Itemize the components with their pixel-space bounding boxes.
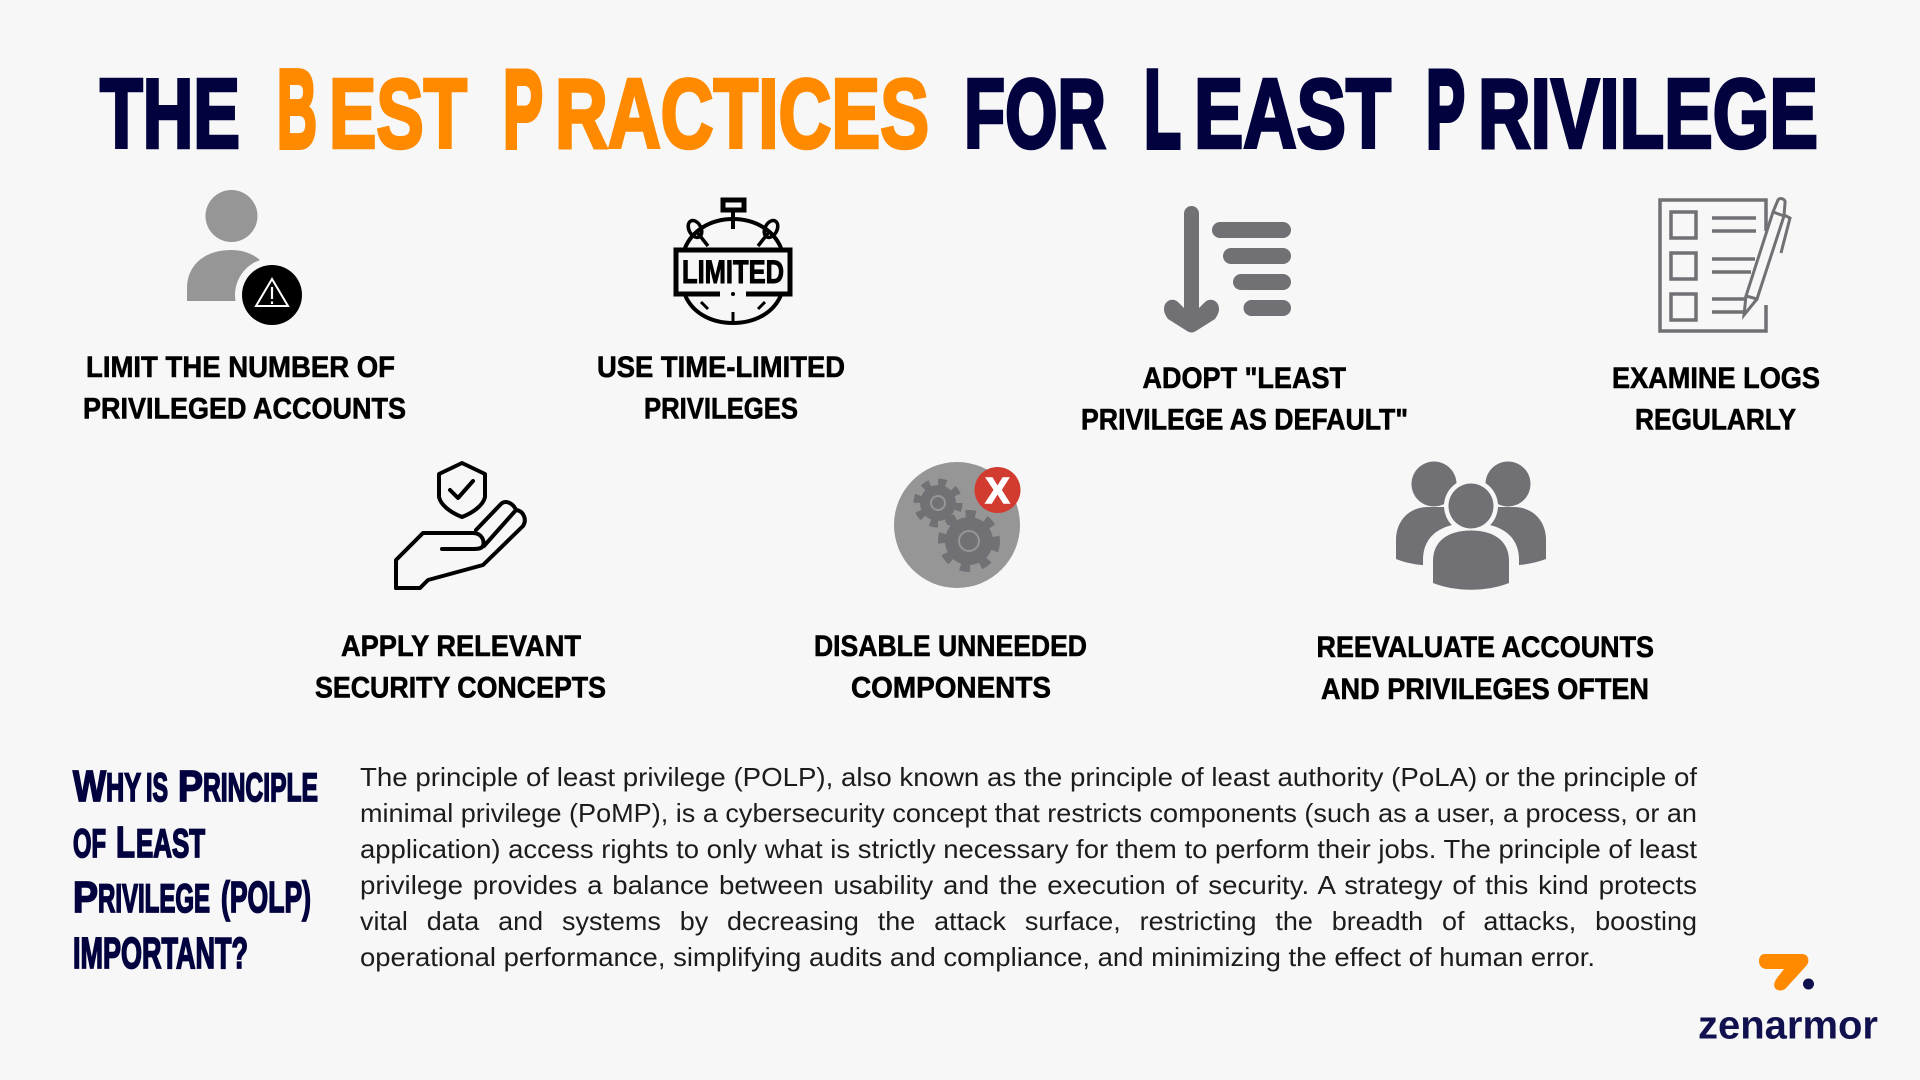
label: examine logs: REGULARLY xyxy=(1635,404,1796,436)
heading: why is polp important: OF xyxy=(73,822,106,866)
red badge letter X: X xyxy=(985,470,1010,511)
logo: zenarmor xyxy=(1698,954,1878,1048)
icon: checklist with pen xyxy=(1660,199,1790,331)
title: FOR xyxy=(964,58,1106,168)
title: P xyxy=(1426,48,1465,172)
heading: why is polp important: P xyxy=(73,873,98,922)
title: B xyxy=(277,48,317,172)
icon: hand holding shield xyxy=(396,463,525,588)
heading: why is polp important: L xyxy=(116,818,135,867)
heading: why is polp important: IMPORTANT? xyxy=(73,929,248,978)
title: RACTICES xyxy=(555,58,929,168)
label: time-limited privileges: PRIVILEGES xyxy=(644,392,798,426)
label: apply security concepts: SECURITY CONCEPTS xyxy=(315,672,606,704)
icon: disabled gears xyxy=(894,462,1020,588)
title: P xyxy=(503,48,543,172)
text block: explanation of polp: vital data and systems by decreasing the attack surface, restricting the breadth of attacks, boosting xyxy=(360,906,1697,936)
label: limit privileged accounts: PRIVILEGED ACCOUNTS xyxy=(83,392,406,426)
text block: explanation of polp: privilege provides a balance between usability and the execution of security. A strategy of this kind protects xyxy=(360,870,1697,900)
heading: why is polp important: (POLP) xyxy=(221,873,311,922)
icon: limited stopwatch xyxy=(676,200,790,323)
heading: why is polp important: RIVILEGE xyxy=(98,877,210,921)
title: THE xyxy=(100,58,240,168)
title: L xyxy=(1144,48,1181,172)
text block: explanation of polp: operational performance, simplifying audits and compliance, and minimizing the effect of human error. xyxy=(360,942,1595,972)
label: least privilege as default: PRIVILEGE AS DEFAULT" xyxy=(1081,404,1408,436)
text block: explanation of polp: minimal privilege (PoMP), is a cybersecurity concept that restricts components (such as a user, a process, or an xyxy=(360,798,1697,828)
text block: explanation of polp: application) access rights to only what is strictly necessary for them to perform their jobs. The principle of least xyxy=(360,834,1698,864)
heading: why is polp important: IS xyxy=(146,766,168,810)
label: apply security concepts: APPLY RELEVANT xyxy=(341,630,581,663)
title: EST xyxy=(329,58,467,168)
heading: why is polp important: HY xyxy=(106,766,141,810)
label: limit privileged accounts: LIMIT THE NUMBER OF xyxy=(86,351,395,384)
label: disable unneeded components: COMPONENTS xyxy=(851,672,1051,704)
label: least privilege as default: ADOPT "LEAST xyxy=(1142,362,1346,395)
label: examine logs: EXAMINE LOGS xyxy=(1612,362,1820,395)
title: EAST xyxy=(1194,58,1391,168)
heading: why is polp important: W xyxy=(73,762,106,811)
heading: why is polp important: EAST xyxy=(136,822,205,866)
label: time-limited privileges: USE TIME-LIMITED xyxy=(597,351,845,384)
label: disable unneeded components: DISABLE UNNEEDED xyxy=(814,630,1087,663)
label: reevaluate accounts: AND PRIVILEGES OFTEN xyxy=(1321,673,1649,706)
icon: sort descending arrow xyxy=(1164,206,1291,332)
icon: group of people xyxy=(1396,462,1546,592)
text block: explanation of polp: The principle of least privilege (POLP), also known as the principle of least authority (PoLA) or the principle of xyxy=(360,762,1698,792)
heading: why is polp important: RINCIPLE xyxy=(203,766,318,810)
icon: user with warning badge xyxy=(187,190,309,332)
stopwatch word: LIMITED xyxy=(682,254,784,290)
heading: why is polp important: P xyxy=(178,762,203,811)
label: reevaluate accounts: REEVALUATE ACCOUNTS xyxy=(1316,631,1654,664)
logo: zenarmor: zenarmor xyxy=(1698,1004,1878,1048)
